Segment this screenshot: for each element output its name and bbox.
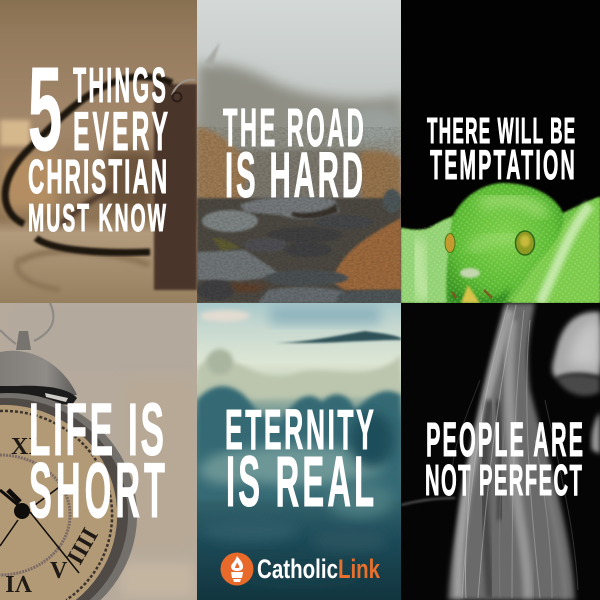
clock numerals	[6, 438, 98, 592]
icon: orange circle with flame cup	[220, 552, 254, 586]
clock numerals: V	[50, 558, 68, 584]
logo: CatholicLink: Catholic	[257, 554, 338, 584]
heading: people are not perfect: NOT PERFECT	[425, 456, 582, 505]
heading: eternity is real: IS REAL	[226, 442, 374, 521]
snake scales	[401, 183, 600, 303]
panel: eternity is real	[197, 303, 401, 600]
hair	[448, 303, 575, 600]
face	[552, 312, 600, 378]
heading: 5 things every Christian must know: 5	[28, 43, 62, 176]
grass	[197, 127, 250, 205]
heading: 5 things every Christian must know: THINGS	[73, 59, 166, 114]
heading: people are not perfect	[425, 412, 583, 505]
panel: life is short	[0, 303, 197, 600]
heading: eternity is real	[225, 399, 374, 521]
heading: there will be temptation: THERE WILL BE	[427, 110, 575, 151]
logo: CatholicLink	[220, 552, 381, 586]
panel: 5 things every Christian must know	[0, 0, 197, 303]
heading: there will be temptation: TEMPTATION	[430, 141, 575, 188]
heading: life is short: LIFE IS	[29, 390, 164, 472]
heading: life is short	[29, 390, 165, 534]
snake head	[446, 183, 563, 303]
heading: 5 things every Christian must know: MUST KNOW	[28, 196, 167, 240]
heading: the road is hard: IS HARD	[225, 139, 363, 211]
clock numerals: IIII	[63, 524, 104, 569]
logo: CatholicLink: Link	[338, 554, 381, 584]
rocks	[240, 197, 340, 219]
nose and mouth	[460, 268, 480, 278]
clock ring and finial	[0, 303, 53, 344]
heading: the road is hard	[223, 97, 364, 211]
panel: there will be temptation	[401, 181, 600, 303]
clock case	[0, 393, 137, 600]
eyes	[516, 231, 534, 255]
clock numerals: XI	[11, 434, 38, 460]
heading: the road is hard: THE ROAD	[223, 97, 364, 158]
panel: the road is hard	[197, 0, 403, 303]
panel: people are not perfect	[401, 303, 600, 600]
heading: 5 things every Christian must know	[28, 43, 168, 240]
heading: people are not perfect: PEOPLE ARE	[426, 412, 583, 466]
heading: eternity is real: ETERNITY	[225, 399, 374, 462]
clock hands	[0, 485, 79, 573]
clock bell	[0, 351, 77, 395]
heading: 5 things every Christian must know: CHRISTIAN	[28, 149, 167, 203]
snake body base	[401, 197, 600, 303]
heading: 5 things every Christian must know: EVERY	[73, 101, 168, 163]
heading: life is short: SHORT	[29, 446, 165, 534]
heading: there will be temptation	[427, 110, 575, 188]
clock numerals: VI	[5, 570, 32, 596]
